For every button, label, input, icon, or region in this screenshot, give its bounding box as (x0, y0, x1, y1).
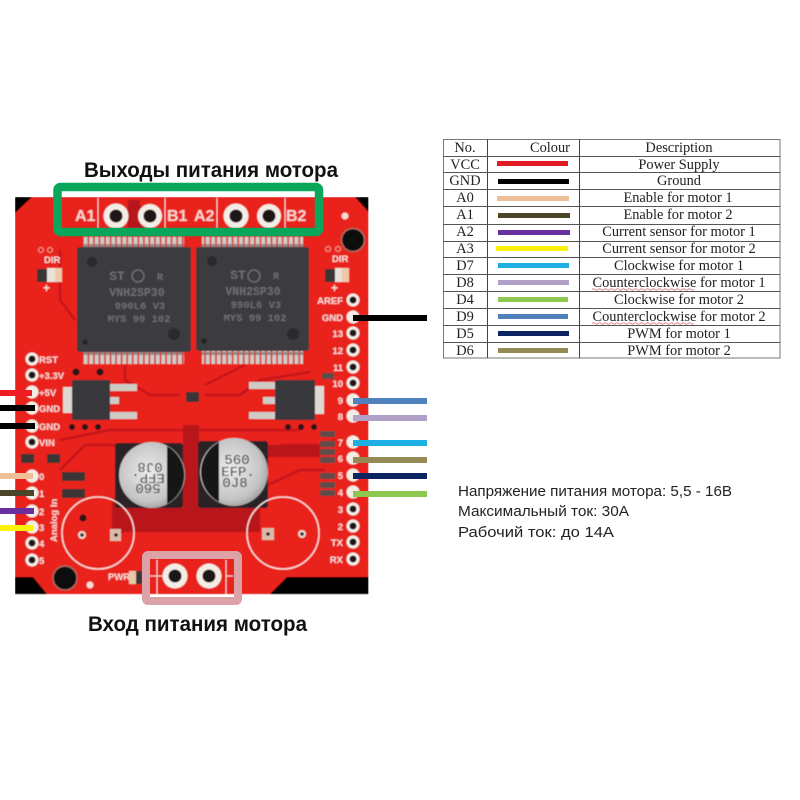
left header labels: 1 (39, 489, 45, 500)
table header: Description (645, 140, 713, 156)
left wires (0, 393, 35, 528)
left header labels: VIN (39, 438, 55, 449)
capacitor left: 560 (135, 479, 161, 495)
green highlight: motor outputs (58, 187, 319, 232)
motor specifications: Рабочий ток: до 14А (458, 524, 614, 541)
circuit board (15, 197, 368, 595)
row D9: Counterclockwise for motor 2 (592, 309, 766, 325)
left header labels: GND (39, 404, 60, 415)
left header labels (39, 355, 65, 567)
PWR LED and label (108, 571, 142, 584)
chip 1: MYS 99 102 (107, 314, 171, 326)
DIR LED left: + (43, 281, 50, 295)
table header: No. (454, 140, 476, 156)
mounting holes (53, 212, 364, 590)
row D8 (456, 275, 766, 291)
capacitor right: EFP. (221, 465, 255, 481)
capacitor left: 0J8 (137, 458, 163, 474)
title: motor power input: Вход питания мотора (88, 613, 307, 636)
row GND: GND (449, 173, 481, 189)
DIR LED right: DIR (332, 254, 348, 265)
row A2: Current sensor for motor 1 (602, 224, 756, 240)
terminal labels (75, 208, 307, 225)
dark copper areas (112, 200, 320, 533)
motor pads left (62, 497, 134, 569)
row D6: PWM for motor 2 (627, 343, 731, 359)
chip 2: R (273, 271, 280, 283)
terminal labels: A2 (194, 208, 215, 225)
DIR LED left: DIR (44, 255, 60, 266)
right header labels: 9 (338, 396, 343, 407)
right header labels: 3 (338, 505, 343, 516)
right header labels: AREF (317, 296, 343, 307)
voltage regulator right (249, 380, 324, 430)
right wires (353, 318, 427, 494)
right header labels: 13 (332, 329, 343, 340)
pink highlight: power input (146, 555, 238, 601)
terminal labels: B2 (286, 208, 307, 225)
motor specifications: Максимальный ток: 30А (458, 503, 629, 520)
row D6: D6 (456, 343, 474, 359)
motor pads right (247, 497, 319, 569)
row D9 (456, 309, 766, 325)
row D4: D4 (456, 292, 474, 308)
row D5: D5 (456, 326, 474, 342)
table header (454, 140, 713, 156)
chip 1: 990L6 V3 (115, 301, 165, 313)
chip 1 (77, 237, 191, 364)
power input terminals (150, 560, 233, 595)
chip 2: 990L6 V3 (231, 300, 281, 312)
right header labels: 10 (332, 379, 343, 390)
right header labels: 12 (332, 346, 343, 357)
row D4 (456, 292, 744, 308)
chip 1: R (157, 272, 164, 284)
DIR LED right: + (331, 281, 338, 295)
board corner cut-outs (15, 197, 368, 594)
left header labels: 3 (39, 523, 44, 534)
capacitor right: 0J8 (222, 476, 248, 492)
row VCC: Power Supply (638, 157, 720, 173)
row GND (449, 173, 702, 189)
row A0: Enable for motor 1 (623, 190, 733, 206)
row VCC (450, 157, 720, 173)
row A1: A1 (456, 207, 474, 223)
row D9: D9 (456, 309, 474, 325)
row D7: D7 (456, 258, 474, 274)
capacitor left (115, 442, 185, 508)
row A3: Current sensor for motor 2 (602, 241, 756, 257)
left header labels: RST (39, 355, 58, 366)
row A3 (456, 241, 756, 257)
chip 2: VNH2SP30 (225, 286, 281, 299)
terminal holes (104, 204, 281, 228)
voltage regulator left (63, 368, 137, 430)
row A3: A3 (456, 241, 474, 257)
right header labels: 4 (338, 488, 344, 499)
capacitor right: 560 (224, 453, 250, 469)
row D6 (456, 343, 731, 359)
title: motor power outputs: Выходы питания мотора (84, 159, 338, 182)
analog in label: Analog In (49, 499, 60, 542)
row A2 (456, 224, 756, 240)
terminal labels: A1 (75, 208, 96, 225)
left header labels: +5V (39, 388, 57, 399)
row A1: Enable for motor 2 (623, 207, 733, 223)
chip 2: MYS 99 102 (223, 313, 287, 325)
row D4: Clockwise for motor 2 (614, 292, 744, 308)
row D5 (456, 326, 731, 342)
chip 2: ST (230, 268, 246, 283)
row D7: Clockwise for motor 1 (614, 258, 744, 274)
row D8: D8 (456, 275, 474, 291)
table header: Colour (530, 140, 570, 156)
motor specifications (458, 483, 732, 541)
left header labels: 0 (39, 472, 44, 483)
table grid (443, 139, 780, 358)
left header pins (26, 352, 65, 567)
terminal dividers (98, 198, 285, 228)
left header labels: 5 (39, 556, 45, 567)
chip 1: VNH2SP30 (109, 287, 165, 300)
row A0 (456, 190, 733, 206)
terminal labels: B1 (167, 208, 188, 225)
right header labels: 11 (333, 363, 344, 374)
SMD parts (21, 373, 335, 498)
left header labels: GND (39, 422, 60, 433)
right header labels (317, 296, 344, 566)
board traces (60, 250, 335, 510)
right header labels: GND (322, 313, 343, 324)
right header labels: 5 (338, 471, 344, 482)
row A2: A2 (456, 224, 474, 240)
right header labels: RX (330, 555, 344, 566)
right header labels: 2 (338, 522, 343, 533)
capacitor right (198, 438, 268, 508)
row D8: Counterclockwise for motor 1 (592, 275, 766, 291)
capacitor left: EFP. (131, 469, 165, 485)
left header labels: +3.3V (39, 371, 65, 382)
right header labels: 7 (338, 438, 343, 449)
row VCC: VCC (450, 157, 480, 173)
row A1 (456, 207, 733, 223)
right header labels: 6 (338, 454, 343, 465)
left header labels: 4 (39, 539, 45, 550)
row A0: A0 (456, 190, 474, 206)
left header labels: 2 (39, 507, 44, 518)
row D7 (456, 258, 744, 274)
right header labels: 8 (338, 412, 343, 423)
chip 1: ST (109, 269, 125, 284)
right header labels: TX (331, 538, 344, 549)
PWR LED and label: PWR (108, 572, 130, 583)
chip 2 (196, 237, 309, 364)
right header pins (317, 294, 360, 566)
wiring table (443, 139, 780, 359)
DIR LED left (37, 248, 62, 295)
motor specifications: Напряжение питания мотора: 5,5 - 16В (458, 483, 732, 500)
DIR LED right (325, 246, 349, 295)
output terminals (75, 198, 307, 228)
row D5: PWM for motor 1 (627, 326, 731, 342)
row GND: Ground (657, 173, 702, 189)
